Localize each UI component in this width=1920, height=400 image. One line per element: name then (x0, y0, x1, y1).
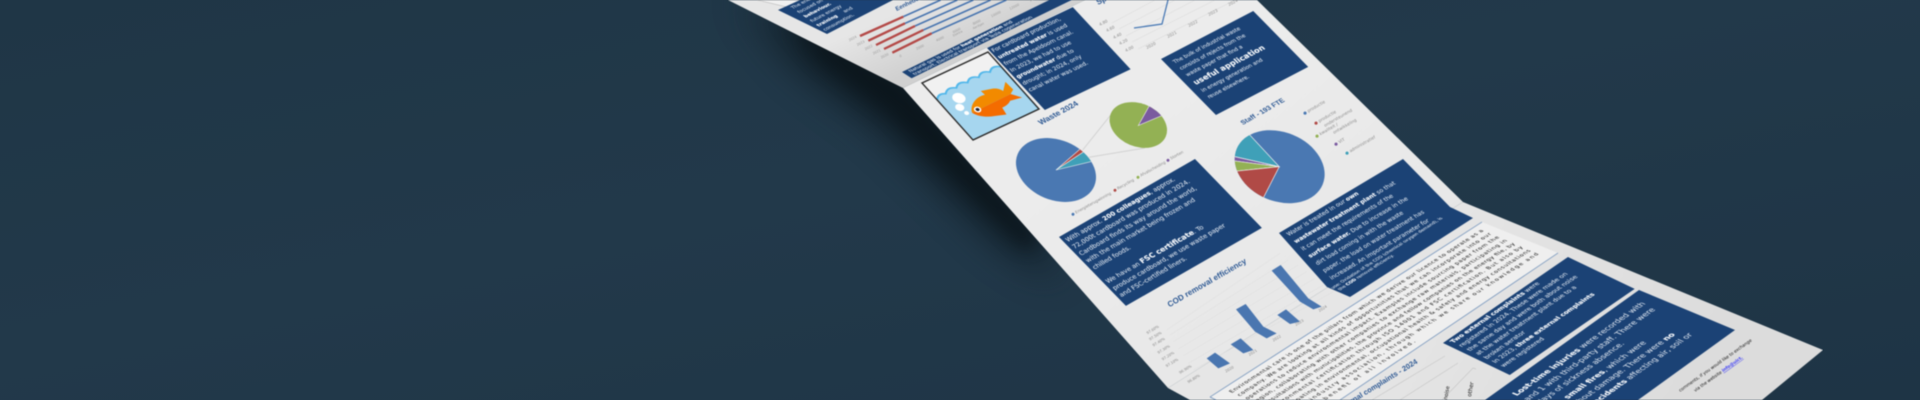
bar chart: energy: 2023 (856, 40, 865, 47)
text box: useful application: consists of rejects from the (1178, 33, 1248, 71)
line chart: specific consumption: 2021 (1166, 30, 1178, 39)
line chart: specific consumption: 2020 (1145, 41, 1157, 50)
text box: colleagues and FSC: With approx. 200 colleagues, approx. (1064, 176, 1177, 243)
text box: complaints: were (1520, 281, 1542, 294)
text panel: environmental care: Environmental care is one of the pillars from which we derive our licence to operate as a (1228, 229, 1486, 394)
pie legend: ● Recycling (1112, 177, 1135, 193)
bubbles (952, 92, 970, 116)
text box: untreated water: untreated water is used (997, 23, 1069, 60)
text box: energy training: future energy (809, 4, 844, 23)
footer note: comments, if you would like to exchange (1678, 338, 1753, 394)
text box: safety: small fires, which were (1561, 340, 1649, 400)
staff legend: ● administratief (1344, 134, 1377, 156)
text panel: environmental care: company. We are looking at all kinds of opportunities that we can incorporate into our (1236, 232, 1494, 397)
text box: wastewater treatment: use: Oxidation of the COD (chemical oxygen demand), is (1329, 216, 1445, 290)
line chart: specific consumption: 4.20 (1118, 37, 1129, 46)
text box: colleagues and FSC: Cardboard finds its way around the world, (1077, 185, 1199, 257)
text box: wastewater treatment: increased. An important parameter for (1329, 218, 1432, 281)
pie chart: waste (1015, 101, 1184, 216)
pie legend (1070, 149, 1185, 217)
line chart: specific consumption: 4.80 (1098, 18, 1109, 27)
text box: complaints: In 2023, three external complaints (1490, 292, 1597, 364)
text box: untreated water: drought; in 2024, only (1021, 54, 1084, 87)
pie legend: ● Afvalscheiding (1135, 159, 1167, 180)
bar chart: energy: Elektra (952, 29, 963, 38)
paper: top segment (728, 0, 1085, 88)
text box: wastewater treatment: surface water. (1308, 231, 1352, 259)
bar chart: energy: 2020 (880, 52, 889, 60)
text box: useful application: useful application (1191, 44, 1267, 86)
bar chart: energy: 4000 (935, 35, 945, 43)
bar chart: COD removal efficiency: 96.90% (1178, 364, 1193, 375)
footer note: via the website info@uict. (1693, 355, 1744, 394)
chart: complaints 2024: other (1467, 381, 1476, 397)
text box: useful application: The bulk of industrial waste (1171, 26, 1243, 65)
chart: complaints 2024: noise (1443, 386, 1451, 400)
bar chart: COD removal efficiency: 97.50% (1148, 331, 1163, 342)
text box: wastewater treatment: Due to increase in the (1348, 196, 1410, 235)
text box: energy training: consumption. (822, 13, 857, 32)
line chart: specific consumption: 2022 (1187, 19, 1199, 28)
bar chart: COD removal efficiency: 2023 (1294, 318, 1305, 327)
bar chart: COD removal efficiency: 2022 (1272, 334, 1282, 343)
text box: colleagues and FSC: with the main market being frozen and (1084, 196, 1197, 264)
line chart: specific consumption: 4.40 (1112, 31, 1123, 40)
text box: colleagues and FSC: 72,000t cardboard was produced in 2024. (1070, 178, 1192, 250)
bar chart: energy: 6000 (952, 27, 961, 34)
text box: energy training (778, 0, 893, 34)
text box: useful application: waste paper that find a (1185, 45, 1245, 78)
bar chart: COD removal efficiency: 2024 (1318, 304, 1328, 313)
text box: untreated water: canal water was used. (1028, 61, 1090, 93)
text panel: environmental care: operations to reduce environmental impact. Examples include sourcing paper from the (1244, 236, 1502, 400)
bar chart: COD removal efficiency: 96.80% (1187, 373, 1201, 384)
text box: useful application (1161, 11, 1308, 115)
bar chart: energy: 2021 (872, 48, 881, 56)
text box: safety: Lost-time injuries were recorded with (1510, 301, 1648, 397)
text box: untreated water: due to (1053, 49, 1076, 62)
bar chart: COD removal efficiency: 2021 (1248, 349, 1258, 357)
text box: colleagues and FSC: We have an FSC certificate. To (1104, 224, 1206, 285)
line chart: specific consumption: 2023 (1207, 8, 1219, 17)
text box: complaints (1443, 257, 1635, 375)
text box: wastewater treatment (1279, 159, 1473, 297)
text box: untreated water: In 2023, we had to use (1009, 40, 1074, 73)
COD bars (1207, 265, 1322, 368)
text box: untreated water: For cardboard production, (991, 17, 1063, 54)
staff legend: ontwikkeling (1332, 117, 1358, 135)
paper shadow (740, 0, 1060, 280)
pie legend: ● Energieterugwinning (1070, 190, 1112, 217)
staff legend: ondersteunend (1323, 107, 1353, 128)
text box: natural gas: transport. Electrical transport via Tesla cogeneration (912, 15, 1034, 76)
text box: wastewater treatment: paper, the load on water treatment has (1322, 210, 1426, 274)
text box: complaints: at the water treatment plant due to a (1473, 285, 1579, 356)
bar chart: COD removal efficiency: 97.60% (1146, 324, 1160, 335)
text box: wastewater treatment: wastewater treatment plant (1293, 192, 1378, 245)
bar chart: COD removal efficiency: 97.10% (1165, 357, 1180, 368)
text box: complaints: were registered (1498, 336, 1547, 368)
text box: complaints: the same day and were both about noise (1465, 274, 1580, 352)
chart: complaints 2024 (1335, 356, 1476, 400)
text box: colleagues and FSC (1059, 159, 1262, 306)
staff legend: ● VIT (1333, 136, 1346, 147)
text box: complaints: registered in 2024. These were made on (1456, 271, 1570, 348)
bar chart: COD removal efficiency (1146, 253, 1333, 384)
water (932, 65, 1040, 142)
bar chart: COD removal efficiency: 97.40% (1152, 337, 1166, 348)
text box: complaints: broken aerator (1482, 330, 1528, 360)
text box: wastewater treatment: so that (1374, 181, 1398, 197)
text box: colleagues and FSC: chilled foods. (1090, 244, 1133, 271)
staff legend: ● productie (1313, 109, 1337, 126)
text box: energy training: training (815, 14, 840, 28)
staff legend (1302, 99, 1377, 156)
text box: wastewater treatment: Water is treated in our own (1286, 191, 1361, 238)
text panel: environmental care (1210, 222, 1558, 400)
text box: natural gas (902, 0, 1097, 79)
pie chart: staff (1234, 100, 1376, 204)
icon: goldfish bowl (921, 52, 1040, 142)
bar chart: energy: Aardgas (972, 21, 985, 30)
bar chart: energy: 10000 (990, 10, 1002, 18)
folded report page (728, 0, 1823, 400)
bar chart: COD removal efficiency: 2020 (1224, 365, 1235, 374)
text box: wastewater treatment: dirt load coming in with the waste (1315, 211, 1406, 267)
text box: complaints: Two external complaints (1448, 291, 1528, 344)
text box: untreated water (987, 7, 1131, 110)
text box: colleagues and FSC: and FSC-certified liners. (1117, 255, 1189, 299)
text box: natural gas: Natural gas is used for heat generation and (907, 20, 1015, 73)
text box: untreated water: groundwater (1015, 57, 1058, 80)
text box: safety (1485, 290, 1735, 400)
bar chart: COD removal efficiency: 97.20% (1161, 351, 1176, 362)
text box: energy training: behaviour. (803, 2, 833, 19)
text box: useful application: in energy generation and (1200, 58, 1265, 94)
bar chart: energy: 2024 (848, 35, 857, 42)
text box: wastewater treatment: the COD removal efficiency. (1337, 254, 1396, 291)
chart title: COD removal efficiency (1166, 256, 1248, 309)
chart title: waste: Waste 2024 (1036, 99, 1081, 126)
bar chart: energy (848, 0, 1040, 60)
text box: untreated water: from the Apeldoorn canal. (1003, 30, 1075, 67)
line chart: specific consumption: 4.60 (1105, 24, 1116, 33)
line chart: specific consumption: 4.00 (1124, 44, 1135, 53)
text box: energy training: and (842, 6, 855, 14)
pie legend: ● Storten (1165, 149, 1185, 163)
bar chart: energy: 12000 (1009, 3, 1020, 11)
bar chart: energy: 8000 (972, 19, 981, 26)
bar chart: energy: 0 (899, 54, 902, 58)
paper: middle segment (903, 0, 1463, 388)
white figure corner top (757, 0, 800, 7)
line chart: specific consumption (1095, 0, 1239, 53)
paper: lower segment (1168, 202, 1823, 400)
chart title: staff: Staff - 193 FTE (1240, 97, 1287, 126)
staff legend: ● productie (1302, 99, 1326, 116)
fish (970, 82, 1022, 118)
text box: wastewater treatment: it can meet the requirements of the (1300, 194, 1395, 252)
bar chart: energy: 2000 (915, 44, 925, 51)
staff legend: ● kwaliteit / (1314, 121, 1339, 139)
bar chart: COD removal efficiency: 97.30% (1157, 344, 1171, 355)
text box: safety: and 1 with third-party staff. There were (1521, 307, 1658, 400)
text box: colleagues and FSC: produce cardboard, we use waste paper (1111, 222, 1228, 292)
bar chart: energy: 2022 (864, 44, 873, 51)
text box: useful application: reuse elsewhere. (1206, 74, 1251, 100)
